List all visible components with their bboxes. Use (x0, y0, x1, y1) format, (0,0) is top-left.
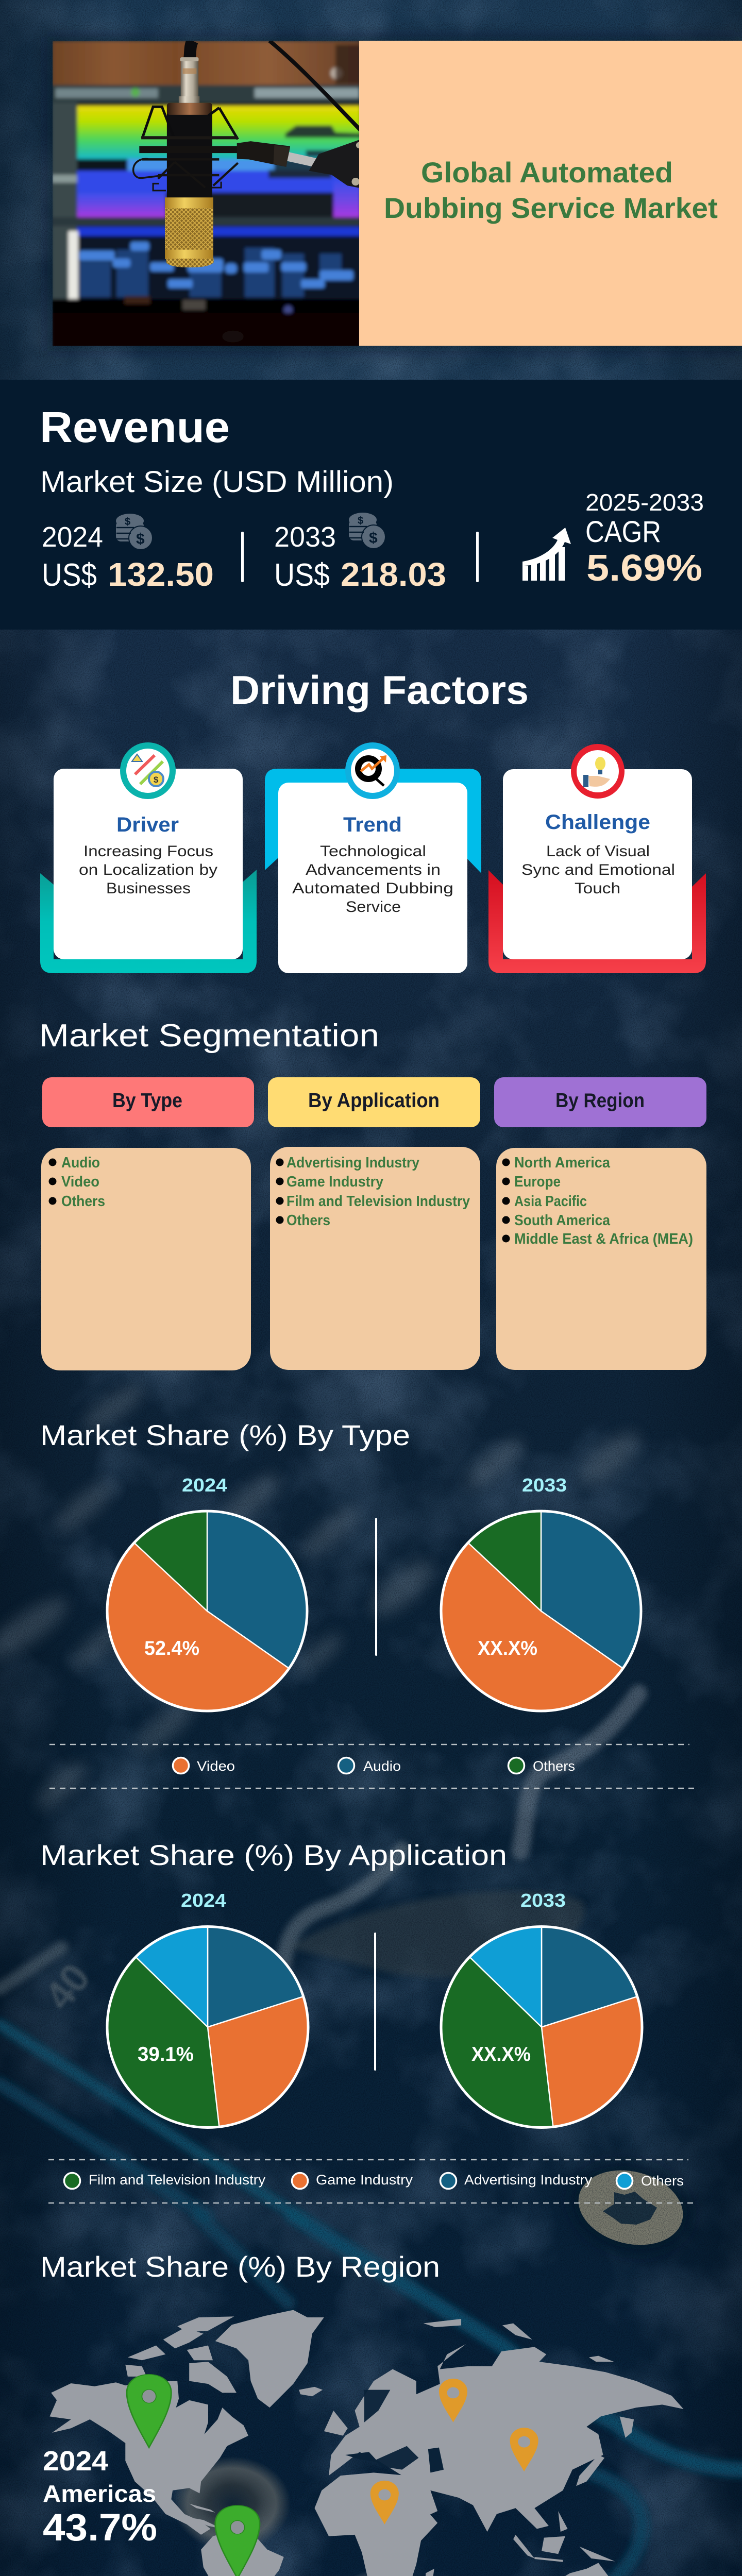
legend: application (48, 2160, 693, 2203)
world map (49, 2310, 684, 2576)
pin: asia (510, 2428, 538, 2471)
pin: south america (215, 2505, 260, 2576)
list: regions: Middle East & Africa (MEA) (514, 1231, 693, 1247)
icon: driver (120, 742, 176, 799)
label: 2024: 2024 (182, 1475, 227, 1496)
list: types: Others (61, 1193, 105, 1210)
icon: coins: $ (125, 516, 130, 528)
heading: market segmentation: Market Segmentation (39, 1018, 379, 1054)
icon: challenge (571, 744, 625, 799)
pie chart: application 2024: 39.1% (138, 2043, 194, 2065)
card text: Service (346, 899, 401, 916)
title: Dubbing Service Market (384, 192, 718, 224)
card heading: Challenge (545, 811, 650, 834)
legend: application: Film and Television Industry (89, 2172, 266, 2188)
legend: type: Audio (363, 1758, 401, 1774)
legend: type: Others (533, 1758, 575, 1774)
panel: revenue (0, 380, 742, 630)
list: regions: North America (514, 1155, 611, 1171)
icon: coins: $ (369, 530, 378, 547)
stat: CAGR: 2025-2033 (585, 489, 704, 516)
label: 2033: 2033 (520, 1890, 566, 1911)
stat: 2024 revenue (42, 514, 214, 593)
card text: Increasing Focus (83, 843, 213, 860)
title: Global Automated (421, 156, 673, 189)
pie chart: application 2033 (441, 1926, 642, 2128)
icon: trend (345, 742, 400, 799)
callout: americas share: Americas (43, 2480, 156, 2507)
icon: coins: $ (136, 531, 145, 548)
list: applications (276, 1155, 470, 1229)
list: applications: Others (286, 1212, 330, 1229)
legend: application: Game Industry (316, 2172, 413, 2188)
label: 2024: 2024 (181, 1890, 226, 1911)
divider (241, 532, 244, 582)
panel: hero banner (47, 37, 742, 351)
heading: market share by application: Market Share (%) By Application (40, 1839, 507, 1871)
pie chart: application 2024 (107, 1926, 308, 2128)
title (384, 156, 718, 224)
pin: middle east and africa (370, 2481, 399, 2524)
card heading: Driver (116, 814, 179, 836)
panel: by type (41, 1077, 254, 1370)
icon: coins: $ (358, 515, 363, 527)
stat: 2033 revenue: US$ (274, 557, 330, 593)
card text (521, 843, 675, 897)
page background: 40 (36, 1955, 99, 2018)
stat: CAGR: CAGR (585, 515, 661, 549)
stat: CAGR: 5.69% (586, 548, 702, 589)
legend: application: Others (641, 2173, 684, 2189)
card text: Touch (575, 880, 620, 897)
stat: 2024 revenue: 132.50 (108, 556, 214, 593)
list: applications: Advertising Industry (286, 1155, 419, 1171)
card text: Automated Dubbing (292, 880, 453, 897)
list: applications: Game Industry (286, 1174, 383, 1190)
panel: by application: By Application (308, 1090, 440, 1112)
heading: driving factors: Driving Factors (230, 667, 529, 713)
list: types: Video (61, 1174, 99, 1190)
divider (375, 1518, 377, 1656)
callout: americas share: 2024 (43, 2446, 108, 2477)
card text: Lack of Visual (546, 843, 650, 860)
legend: type (49, 1744, 695, 1788)
card text: Sync and Emotional (521, 861, 675, 878)
panel: by region (494, 1077, 706, 1370)
pin: north america (127, 2375, 171, 2448)
card heading: Trend (343, 814, 402, 836)
legend: type: Video (197, 1758, 235, 1774)
card text: Businesses (106, 880, 191, 897)
pie chart: type 2024 (107, 1511, 307, 1711)
heading: market share by region: Market Share (%) By Region (40, 2250, 440, 2283)
card text (79, 843, 217, 897)
list: types (48, 1155, 105, 1210)
stat: 2033 revenue: 218.03 (341, 556, 446, 593)
divider (476, 532, 479, 582)
icon: coins (349, 513, 385, 549)
list: types: Audio (61, 1155, 100, 1171)
card text: on Localization by (79, 861, 217, 878)
legend: application: Advertising Industry (464, 2172, 593, 2188)
pie chart: type 2024: 52.4% (144, 1637, 199, 1659)
panel: by region: By Region (555, 1090, 645, 1112)
callout: americas share: 43.7% (43, 2506, 157, 2549)
panel: trend card (265, 742, 481, 973)
stat: 2024 revenue: 2024 (42, 521, 103, 553)
icon: coins (116, 514, 153, 550)
icon: growth chart (522, 528, 571, 581)
stat: 2033 revenue: 2033 (274, 521, 336, 553)
list: regions (502, 1155, 693, 1247)
heading: market share by type: Market Share (%) By Type (40, 1419, 410, 1451)
callout: americas share (43, 2446, 157, 2549)
image: studio microphone photo (52, 41, 362, 350)
icon: driver: $ (154, 775, 159, 785)
panel: title background (359, 41, 742, 346)
pie chart: type 2033 (441, 1511, 641, 1711)
label: 2033: 2033 (522, 1475, 567, 1496)
stat: 2033 revenue (274, 513, 446, 593)
list: regions: Europe (514, 1174, 561, 1190)
subheading: market size: Market Size (USD Million) (40, 465, 394, 499)
pin: europe (439, 2379, 467, 2422)
heading: revenue: Revenue (40, 403, 230, 451)
panel: by type: By Type (112, 1090, 182, 1112)
pie chart: application 2033: XX.X% (471, 2043, 531, 2065)
panel: driver card (40, 742, 257, 973)
stat: 2024 revenue: US$ (42, 557, 97, 593)
panel: challenge card (488, 744, 706, 973)
card text (292, 843, 453, 916)
stat: CAGR (585, 489, 704, 589)
list: regions: Asia Pacific (514, 1193, 587, 1210)
card text: Technological (320, 843, 426, 860)
pie chart: type 2033: XX.X% (478, 1637, 537, 1659)
list: applications: Film and Television Industry (286, 1193, 470, 1210)
card text: Advancements in (306, 861, 441, 878)
panel: by application (268, 1077, 480, 1370)
divider (374, 1933, 376, 2071)
list: regions: South America (514, 1212, 611, 1229)
